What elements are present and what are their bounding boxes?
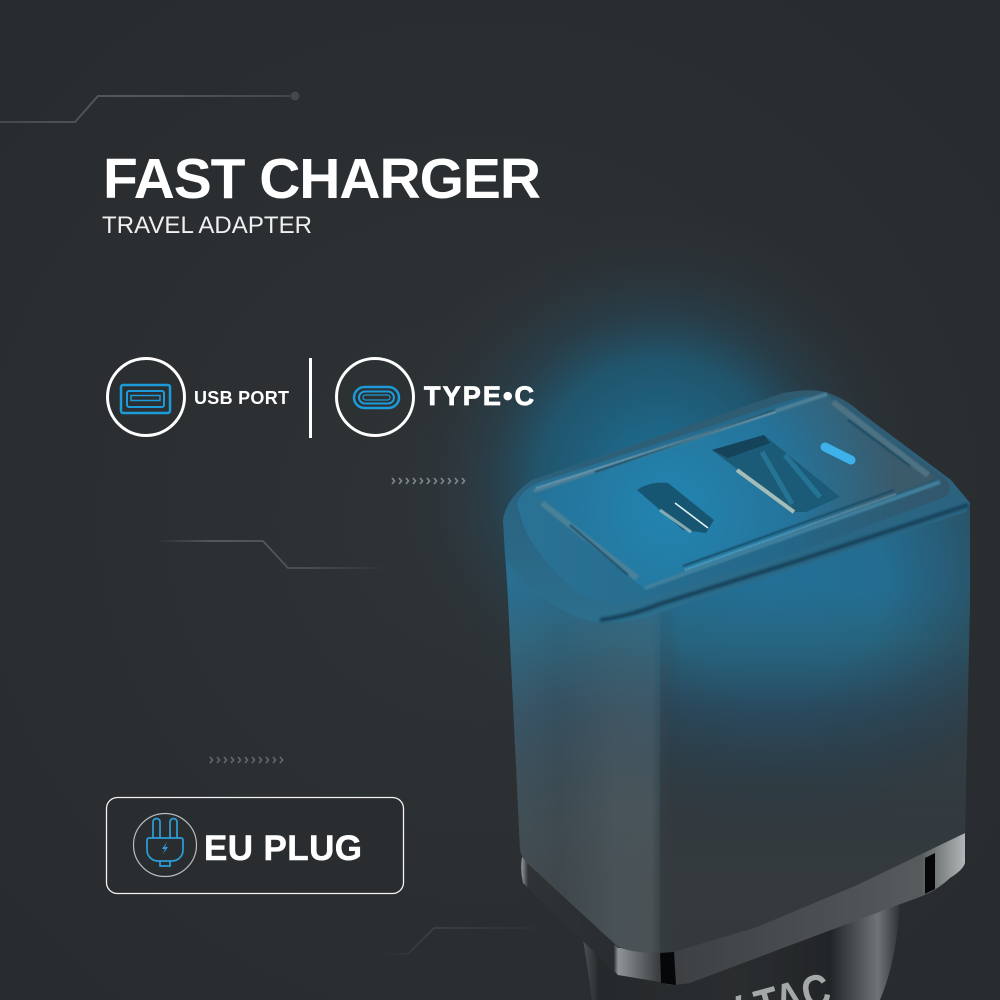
chevron row lower: [210, 757, 282, 763]
USB-C port: [637, 483, 714, 533]
subtitle: TRAVEL ADAPTER: [102, 212, 312, 239]
icon: USB-C port: [336, 358, 414, 436]
circuit line middle: [155, 541, 390, 568]
USB-A port: [712, 435, 840, 512]
label: EU plug: EU PLUG: [204, 829, 362, 868]
icon: EU plug: [134, 814, 196, 876]
blue glow behind charger: [380, 200, 1000, 760]
icon: USB port: [108, 358, 184, 436]
divider: [309, 358, 312, 438]
label: USB port: USB PORT: [194, 388, 289, 408]
top face: [534, 395, 935, 590]
USB port feature: [108, 358, 289, 436]
circuit line top left: [0, 92, 300, 122]
Type-C feature: [336, 358, 534, 436]
EU plug badge: [106, 798, 404, 894]
title: FAST CHARGER: [103, 147, 541, 211]
lower band: [521, 833, 965, 985]
circuit line bottom: [380, 928, 540, 954]
charger: [503, 390, 970, 1000]
face ridges: [534, 394, 940, 588]
rim groove: [600, 505, 968, 620]
main body: [503, 500, 970, 953]
plug base: [583, 900, 900, 1000]
chevron row middle: [392, 478, 464, 484]
inner ring: [517, 396, 950, 602]
label: Type-C: TYPE•C: [424, 381, 534, 411]
top rim: [503, 390, 970, 623]
LED indicator: [825, 447, 851, 460]
